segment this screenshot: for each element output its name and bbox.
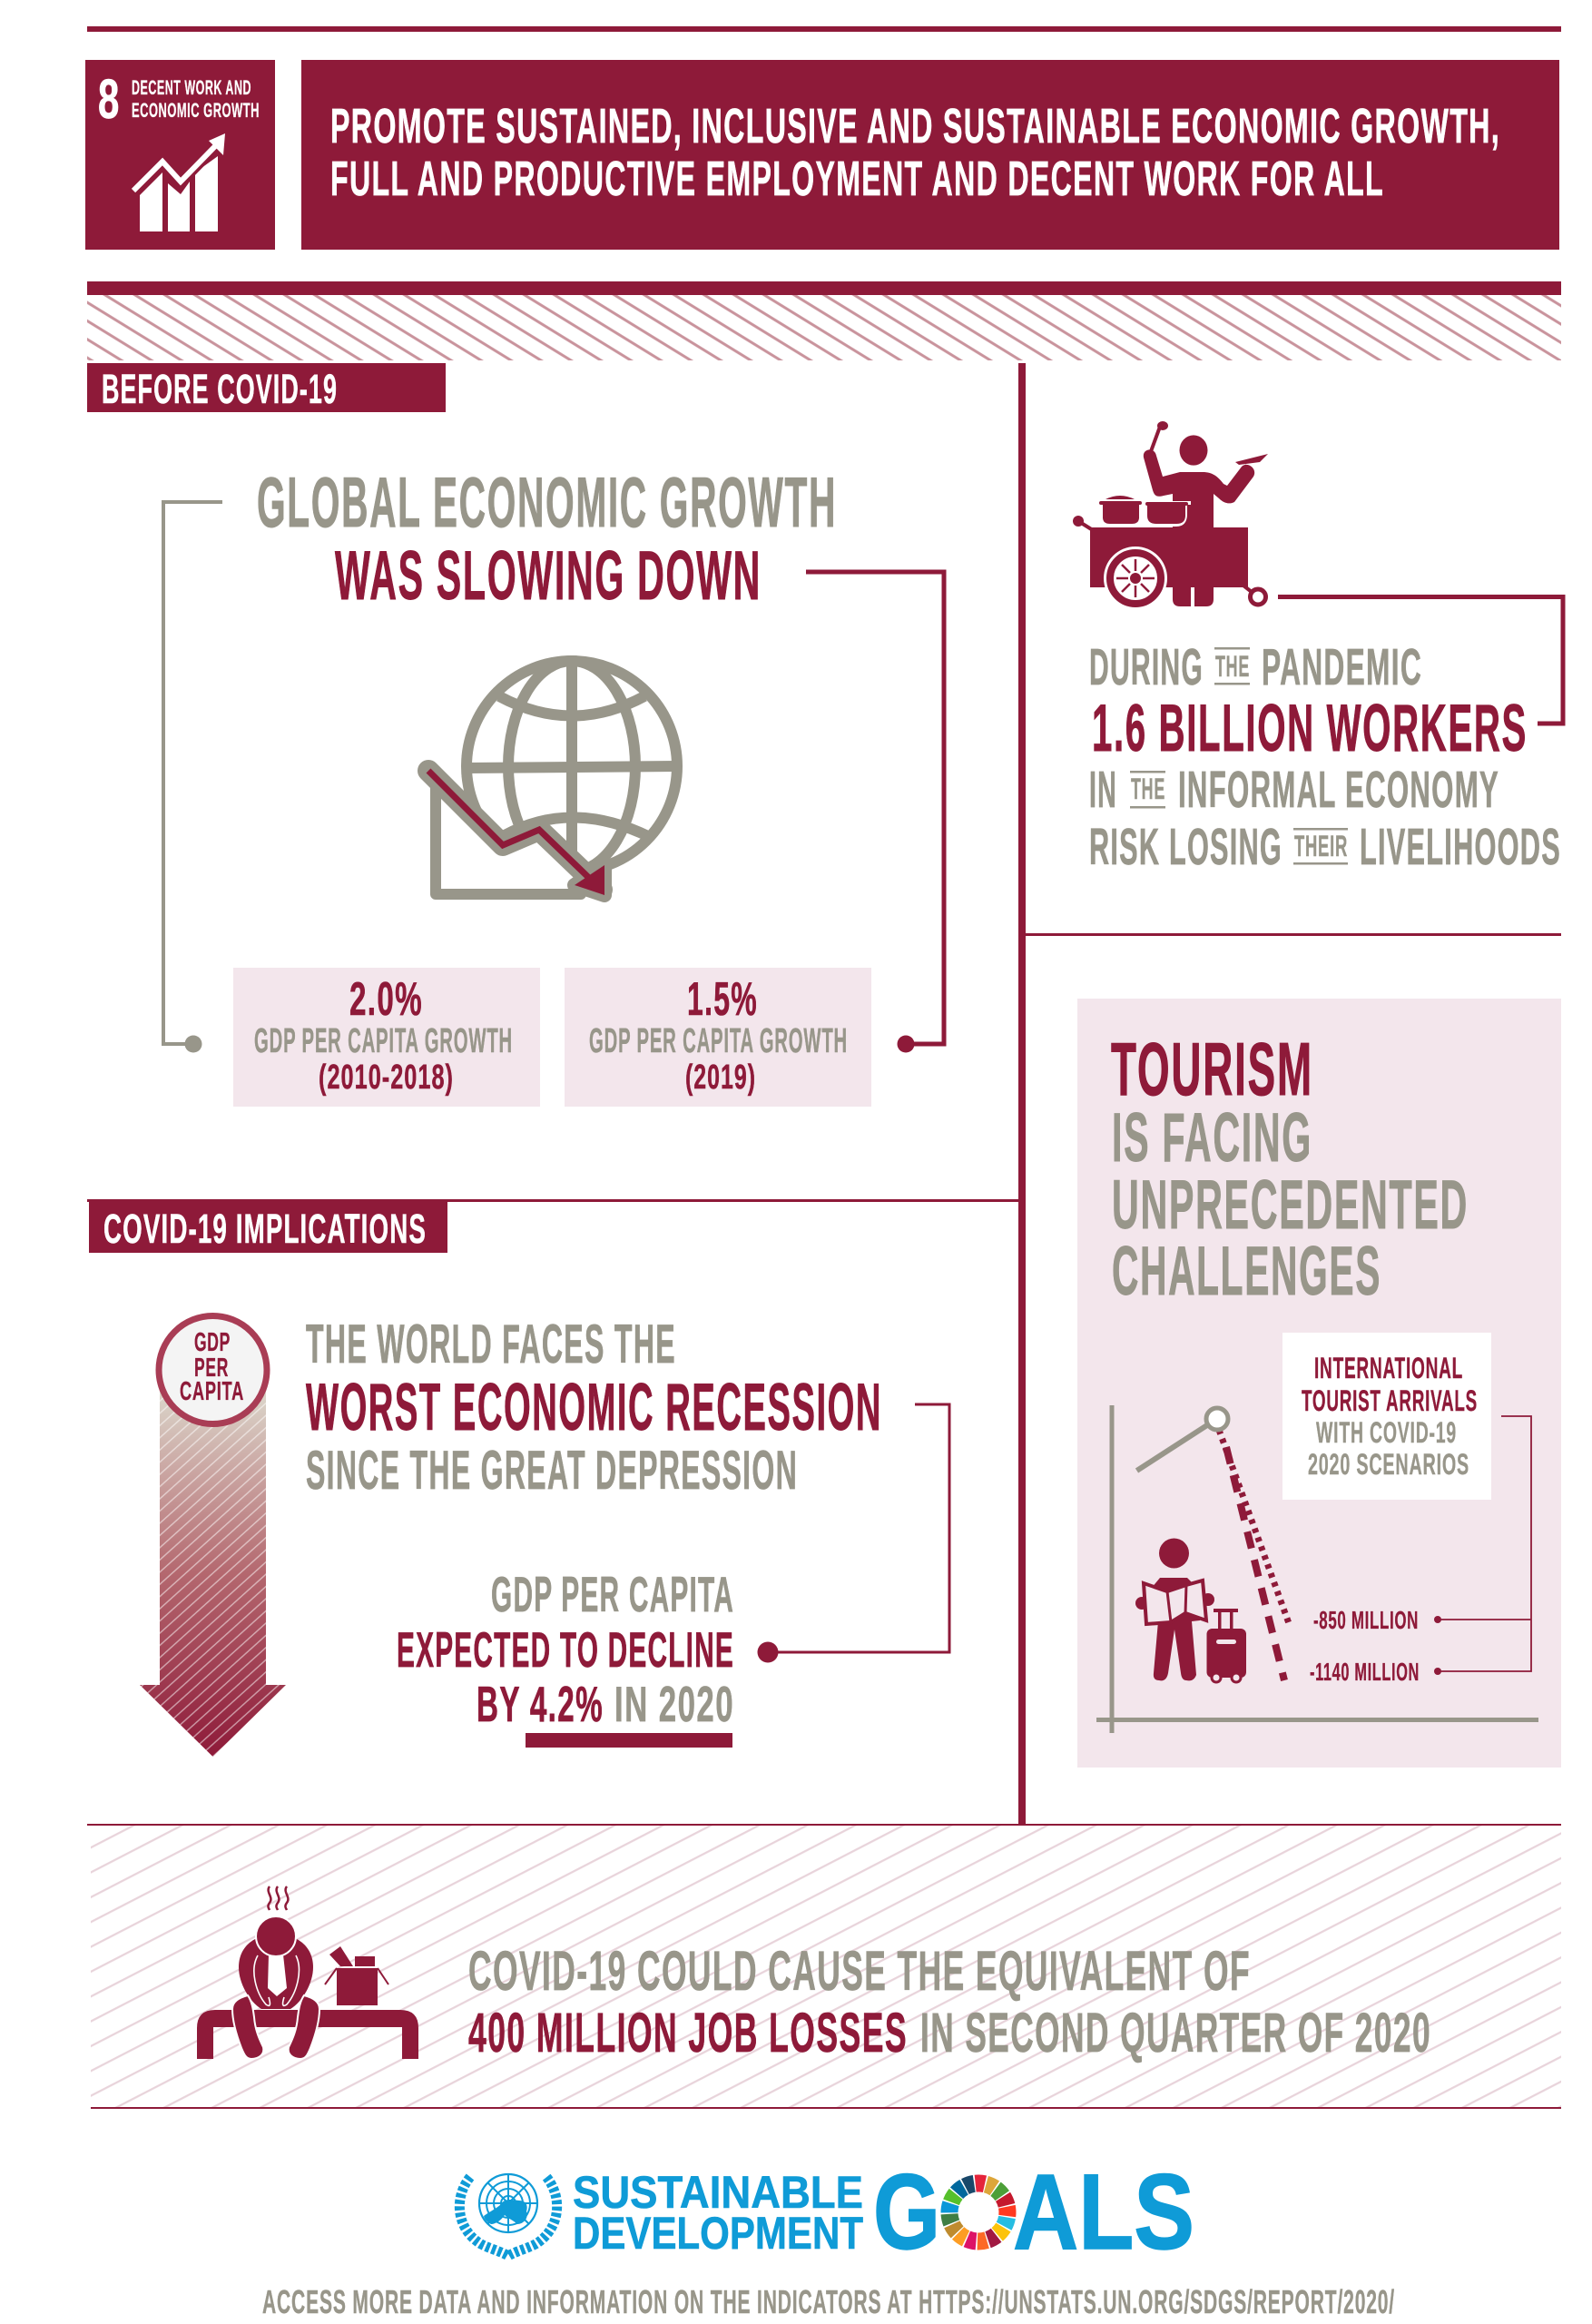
logo: sustainable development goals [459,2152,1194,2272]
stat box: 2.0%: GDP PER CAPITA GROWTH [254,1022,513,1060]
goal 8 badge: DECENT WORK AND [132,76,251,99]
text: gdp expected to decline: GDP PER CAPITA [491,1566,734,1622]
panel: job losses [87,1824,1561,2109]
logo: sustainable development goals: SUSTAINABLE [573,2167,863,2218]
goal 8 badge: 8 [98,68,121,130]
text: gdp expected to decline: BY 4.2% [477,1676,604,1732]
icon: globe with falling chart [422,661,677,912]
legend box: tourist arrivals: INTERNATIONAL [1314,1352,1463,1384]
text: 1.6 billion workers: THE [1215,650,1250,683]
goal 8 badge: ECONOMIC GROWTH [132,99,260,122]
text: 1.6 billion workers: DURING [1089,638,1204,696]
text: worst economic recession: THE WORLD FACES THE [306,1314,676,1374]
text: 400 million job losses: 400 MILLION JOB LOSSES [468,2002,908,2063]
text: 1.6 billion workers: THE [1131,773,1165,805]
text: gdp expected to decline [397,1566,734,1748]
text: 1.6 billion workers: IN [1089,761,1117,819]
stat box: 1.5% [565,968,871,1107]
stat box: 1.5%: (2019) [685,1059,756,1097]
heading: tourism challenges [1111,1027,1469,1310]
text: worst economic recession: SINCE THE GREAT DEPRESSION [306,1440,798,1501]
line chart: tourist arrival scenarios: -1140 MILLION [1310,1658,1420,1686]
stat box: 1.5%: 1.5% [687,973,758,1026]
heading: tourism challenges: IS FACING [1112,1099,1312,1177]
icon: worker on bench [197,1886,418,2059]
line chart: tourist arrival scenarios: -850 MILLION [1313,1606,1419,1634]
line chart: tourist arrival scenarios [1096,1405,1538,1733]
text: 1.6 billion workers [1089,638,1561,876]
logo: sustainable development goals: ALS [1013,2152,1194,2272]
connector: recession to decline [757,1404,949,1663]
arrow: gdp per capita decline: GDP [194,1328,231,1357]
legend box: tourist arrivals: TOURIST ARRIVALS [1302,1384,1478,1417]
icon: tourist with map and suitcase [1135,1538,1246,1682]
text: gdp expected to decline: IN 2020 [614,1676,734,1732]
icon: growth chart [133,133,225,231]
panel: global economic growth [163,462,944,1107]
section label: covid-19 implications [89,1201,447,1253]
connector: grey bracket [163,502,222,1053]
connector: vendor to workers [1278,597,1563,724]
icon: un emblem [459,2174,557,2256]
text: 1.6 billion workers: RISK LOSING [1089,818,1282,876]
panel: informal workers [1073,421,1563,876]
heading: global growth slowing: GLOBAL ECONOMIC GROWTH [257,462,837,542]
connector: red bracket [806,572,944,1053]
stat box: 1.5%: GDP PER CAPITA GROWTH [589,1022,848,1060]
icon: sdg colour wheel [938,2171,1019,2253]
section label: covid-19 implications: COVID-19 IMPLICATIONS [103,1206,427,1252]
stat box: 2.0%: (2010-2018) [319,1059,454,1097]
heading: global growth slowing: WAS SLOWING DOWN [335,537,762,615]
legend box: tourist arrivals [1282,1333,1491,1500]
arrow: gdp per capita decline [140,1316,286,1757]
icon: street food vendor [1073,421,1268,610]
goal 8 badge [85,60,275,250]
text: 1.6 billion workers: THEIR [1294,830,1348,862]
legend box: tourist arrivals: 2020 SCENARIOS [1308,1448,1469,1481]
arrow: gdp per capita decline: CAPITA [180,1377,244,1406]
panel: covid-19 implications [140,1314,949,1757]
heading: tourism challenges: TOURISM [1111,1027,1313,1111]
logo: sustainable development goals: DEVELOPMENT [573,2208,863,2259]
arrow: gdp per capita decline: PER [194,1354,229,1383]
text: worst economic recession [306,1314,882,1501]
section label: before covid-19: BEFORE COVID-19 [102,366,338,412]
stat box: 2.0% [233,968,540,1107]
logo: sustainable development goals: G [873,2152,940,2272]
title banner [301,60,1559,250]
text: worst economic recession: WORST ECONOMIC RECESSION [306,1371,882,1444]
text: 400 million job losses [468,1940,1431,2063]
text: gdp expected to decline: EXPECTED TO DECLINE [397,1621,734,1678]
stat box: 2.0%: 2.0% [349,973,423,1026]
legend box: tourist arrivals: WITH COVID-19 [1316,1416,1457,1449]
panel: tourism [1077,999,1561,1768]
heading: global growth slowing [257,462,837,615]
text: 1.6 billion workers: PANDEMIC [1262,638,1422,696]
